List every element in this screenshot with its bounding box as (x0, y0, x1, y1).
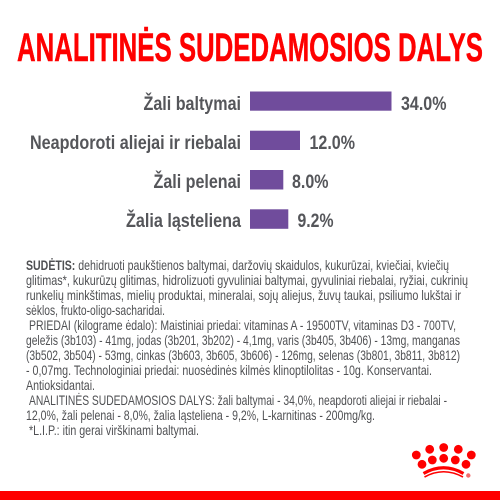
row: Žali pelenai: 8.0% (292, 172, 329, 193)
composition text block: sėklos, frukto-oligo-sacharidai. (26, 302, 165, 318)
composition text block: *L.I.P.: itin gerai virškinami baltymai. (29, 422, 199, 438)
row: Neapdoroti aliejai ir riebalai: Neapdoroti aliejai ir riebalai (30, 133, 241, 154)
composition text block: Antioksidantai. (26, 377, 95, 393)
row: Žali baltymai (144, 92, 447, 115)
composition text block (26, 257, 468, 438)
row: Žali baltymai: Žali baltymai (144, 93, 241, 115)
row: Žalia ląsteliena (126, 209, 334, 232)
row: Neapdoroti aliejai ir riebalai (30, 131, 355, 154)
composition text block: 12,0%, žali pelenai - 8,0%, žalia ląsteliena - 9,2%, L-karnitinas - 200mg/kg. (26, 407, 375, 423)
row: Žali pelenai (154, 170, 329, 193)
row: Žalia ląsteliena: Žalia ląsteliena (126, 210, 241, 232)
icon: Royal Canin crown logo (412, 443, 476, 478)
bar chart (30, 92, 447, 232)
row: Žali pelenai: Žali pelenai (154, 171, 241, 193)
row: Žalia ląsteliena: 9.2% (298, 211, 334, 232)
row: Neapdoroti aliejai ir riebalai: 12.0% (310, 133, 355, 154)
footer bar (0, 491, 500, 500)
row: Žali baltymai: 34.0% (401, 94, 447, 115)
